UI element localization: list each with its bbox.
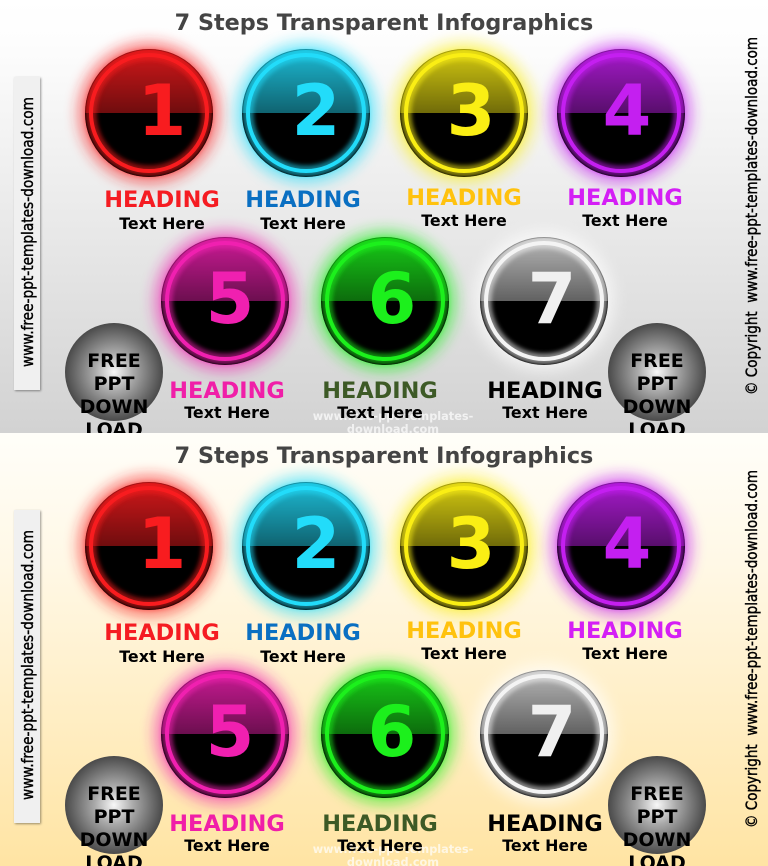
panel: top slide, grey — [0, 10, 768, 441]
step 1 circle: 1 — [138, 70, 186, 152]
left website side label — [14, 77, 40, 390]
step 6 heading: HEADING — [322, 378, 438, 404]
step 7 circle — [473, 663, 615, 805]
step 3 heading: HEADING — [406, 185, 522, 211]
watermark — [313, 843, 474, 866]
step 4 heading: HEADING — [567, 618, 683, 644]
free download badge right — [608, 756, 706, 866]
step 1 text: Text Here — [119, 647, 205, 666]
step 1 circle — [78, 42, 220, 184]
step 5 circle: 5 — [206, 258, 254, 340]
step 2 text: Text Here — [260, 647, 346, 666]
step 7 circle: 7 — [528, 258, 576, 340]
step 3 text: Text Here — [421, 644, 507, 663]
step 7 heading: HEADING — [487, 811, 603, 837]
step 6 heading: HEADING — [322, 811, 438, 837]
step 4 circle — [550, 42, 692, 184]
free download badge left — [65, 323, 163, 441]
step 5 circle — [154, 663, 296, 805]
step 4 circle — [550, 475, 692, 617]
step 7 circle: 7 — [528, 691, 576, 773]
free download badge right: DOWN — [623, 829, 691, 851]
step 5 text: Text Here — [184, 836, 270, 855]
step 5 circle: 5 — [206, 691, 254, 773]
free download badge right — [608, 323, 706, 441]
watermark: www.free-ppt-templates- — [313, 410, 474, 423]
free download badge left: DOWN — [80, 829, 148, 851]
watermark: www.free-ppt-templates- — [313, 843, 474, 856]
step 5 heading: HEADING — [169, 378, 285, 404]
right copyright label: © Copyright www.free-ppt-templates-download.com — [742, 37, 761, 395]
title: 7 Steps Transparent Infographics — [175, 10, 593, 36]
step 4 circle: 4 — [603, 70, 651, 152]
free download badge right: FREE — [630, 783, 684, 805]
step 2 circle — [235, 42, 377, 184]
step 7 text: Text Here — [502, 403, 588, 422]
left website side label: www.free-ppt-templates-download.com — [18, 97, 37, 367]
step 4 circle: 4 — [603, 503, 651, 585]
step 1 circle: 1 — [138, 503, 186, 585]
step 3 heading: HEADING — [406, 618, 522, 644]
step 4 text: Text Here — [582, 644, 668, 663]
free download badge left: FREE — [87, 350, 141, 372]
left website side label — [14, 510, 40, 823]
step 3 circle: 3 — [447, 503, 495, 585]
step 3 circle — [393, 42, 535, 184]
step 7 heading: HEADING — [487, 378, 603, 404]
free download badge left: PPT — [94, 373, 134, 395]
step 1 heading: HEADING — [104, 620, 220, 646]
step 5 circle — [154, 230, 296, 372]
step 2 text: Text Here — [260, 214, 346, 233]
free download badge left: PPT — [94, 806, 134, 828]
free download badge right: FREE — [630, 350, 684, 372]
free download badge right: PPT — [637, 806, 677, 828]
free download badge left: DOWN — [80, 396, 148, 418]
step 1 heading: HEADING — [104, 187, 220, 213]
step 6 text: Text Here — [337, 836, 423, 855]
step 2 circle — [235, 475, 377, 617]
step 3 circle: 3 — [447, 70, 495, 152]
watermark — [313, 410, 474, 436]
step 1 text: Text Here — [119, 214, 205, 233]
panel: bottom slide, cream — [0, 443, 768, 866]
right copyright label: © Copyright www.free-ppt-templates-download.com — [742, 470, 761, 828]
step 1 circle — [78, 475, 220, 617]
free download badge left: LOAD — [85, 419, 143, 441]
watermark: download.com — [347, 423, 439, 436]
free download badge right: DOWN — [623, 396, 691, 418]
free download badge right: PPT — [637, 373, 677, 395]
step 2 circle: 2 — [292, 70, 340, 152]
step 5 heading: HEADING — [169, 811, 285, 837]
step 7 circle — [473, 230, 615, 372]
free download badge left — [65, 756, 163, 866]
step 5 text: Text Here — [184, 403, 270, 422]
step 6 text: Text Here — [337, 403, 423, 422]
title: 7 Steps Transparent Infographics — [175, 443, 593, 469]
step 2 circle: 2 — [292, 503, 340, 585]
step 6 circle — [314, 230, 456, 372]
step 6 circle — [314, 663, 456, 805]
free download badge right: LOAD — [628, 419, 686, 441]
free download badge left: FREE — [87, 783, 141, 805]
step 7 text: Text Here — [502, 836, 588, 855]
step 2 heading: HEADING — [245, 620, 361, 646]
step 2 heading: HEADING — [245, 187, 361, 213]
step 4 text: Text Here — [582, 211, 668, 230]
step 6 circle: 6 — [368, 258, 416, 340]
step 3 circle — [393, 475, 535, 617]
left website side label: www.free-ppt-templates-download.com — [18, 530, 37, 800]
step 6 circle: 6 — [368, 691, 416, 773]
step 3 text: Text Here — [421, 211, 507, 230]
step 4 heading: HEADING — [567, 185, 683, 211]
